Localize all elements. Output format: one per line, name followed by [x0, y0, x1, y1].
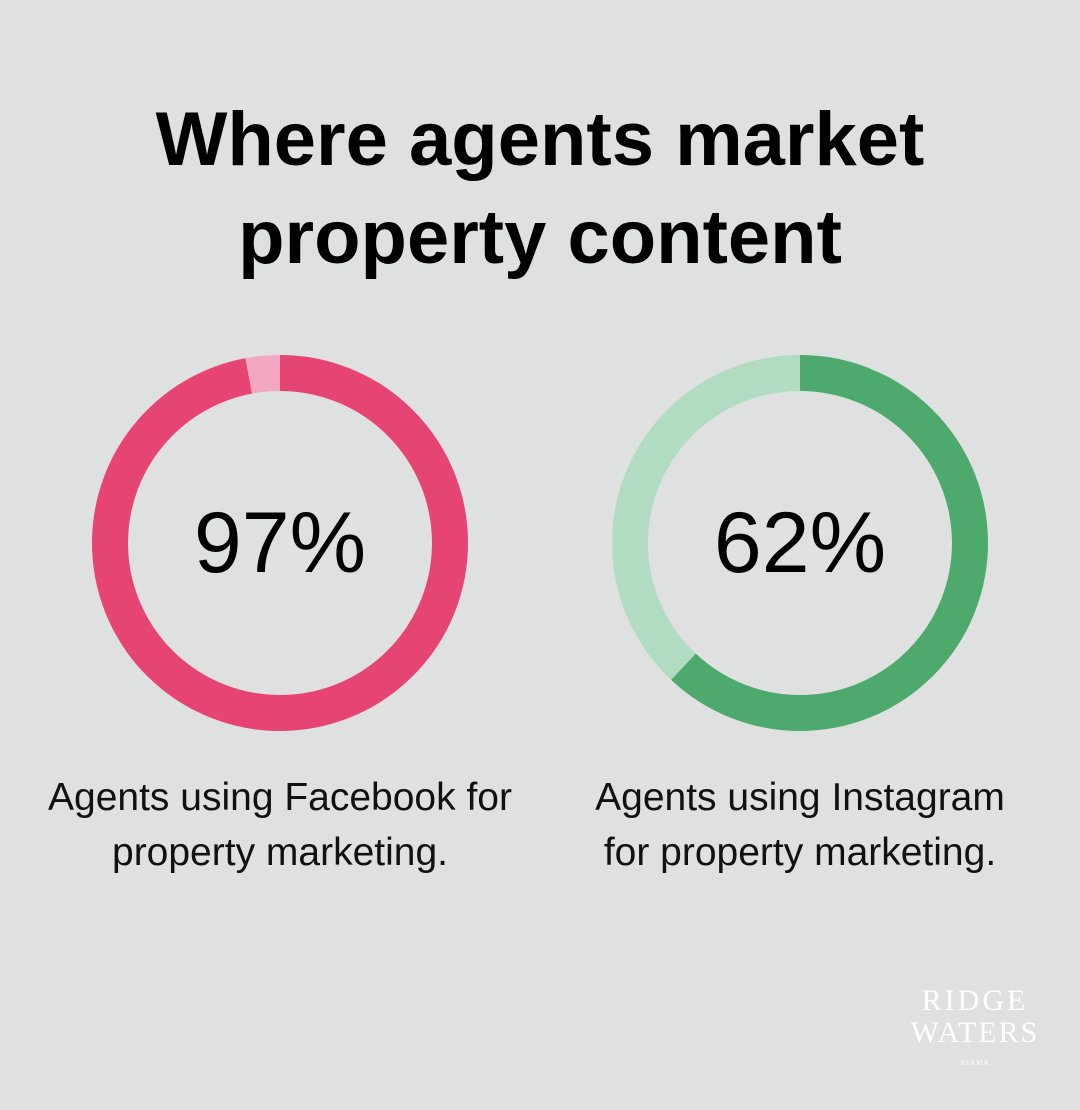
caption: instagram: for property marketing.: [604, 831, 996, 874]
title: Where agents market: [156, 97, 924, 182]
caption: facebook: property marketing.: [112, 831, 448, 874]
caption: instagram: Agents using Instagram: [595, 776, 1005, 819]
logo: ridge waters: RIDGE: [922, 984, 1028, 1017]
caption: facebook: [48, 776, 512, 874]
caption: facebook: Agents using Facebook for: [48, 776, 512, 819]
caption: instagram: [595, 776, 1005, 874]
title: property content: [238, 195, 842, 280]
logo: ridge waters: [910, 984, 1039, 1067]
percentage: 62%: 62%: [714, 495, 886, 591]
logo: ridge waters: WATERS: [911, 1016, 1039, 1049]
percentage: 97%: 97%: [194, 495, 366, 591]
title: [156, 97, 924, 280]
logo: ridge waters: KIAMA: [961, 1059, 989, 1067]
donut chart: facebook 97%: [110, 373, 450, 713]
donut chart: instagram 62%: [630, 373, 970, 713]
